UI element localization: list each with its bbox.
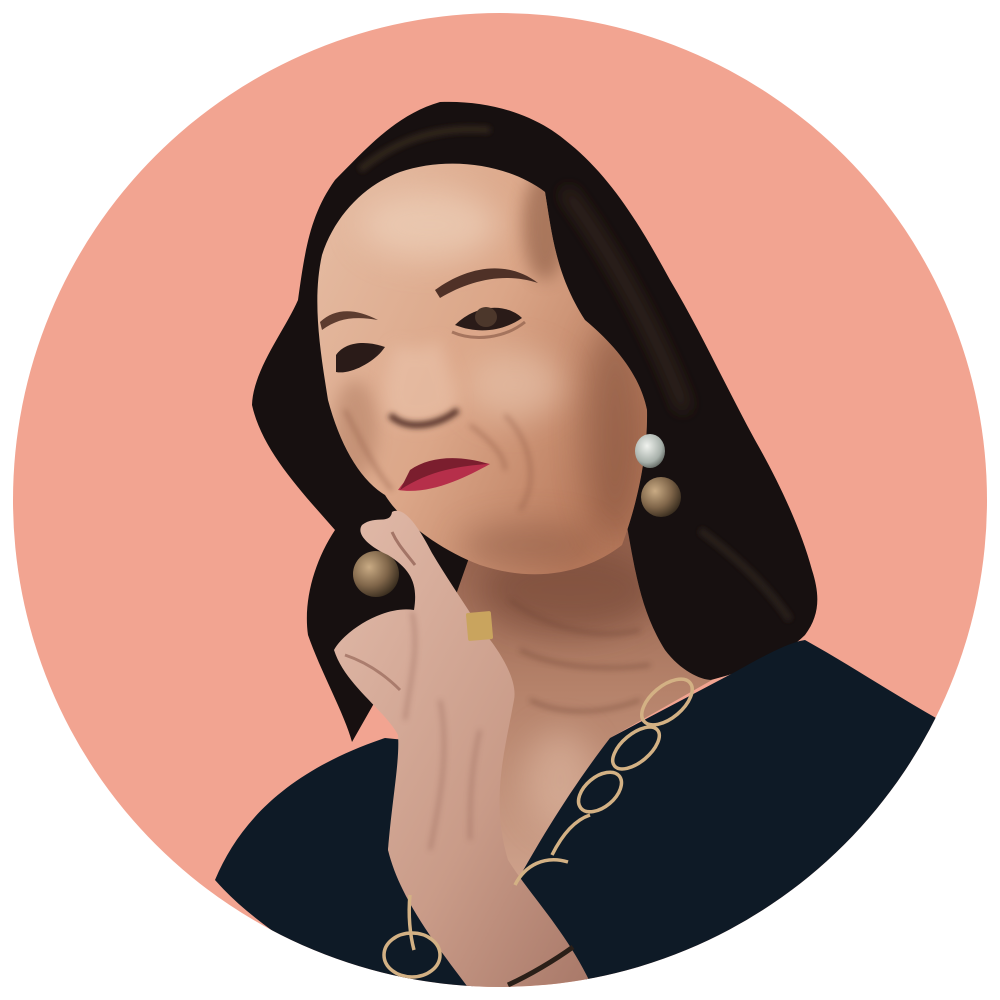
neck and chest <box>456 529 712 876</box>
face <box>317 164 647 574</box>
earrings <box>353 434 681 597</box>
eyes <box>455 308 522 330</box>
hair <box>252 102 817 742</box>
nose <box>384 340 457 425</box>
ring <box>466 611 493 641</box>
bracelet <box>508 947 573 985</box>
lips <box>398 459 490 491</box>
jacket <box>215 640 936 990</box>
figure <box>215 102 936 990</box>
brows <box>435 268 538 298</box>
hand <box>334 511 590 990</box>
necklace <box>384 670 700 977</box>
